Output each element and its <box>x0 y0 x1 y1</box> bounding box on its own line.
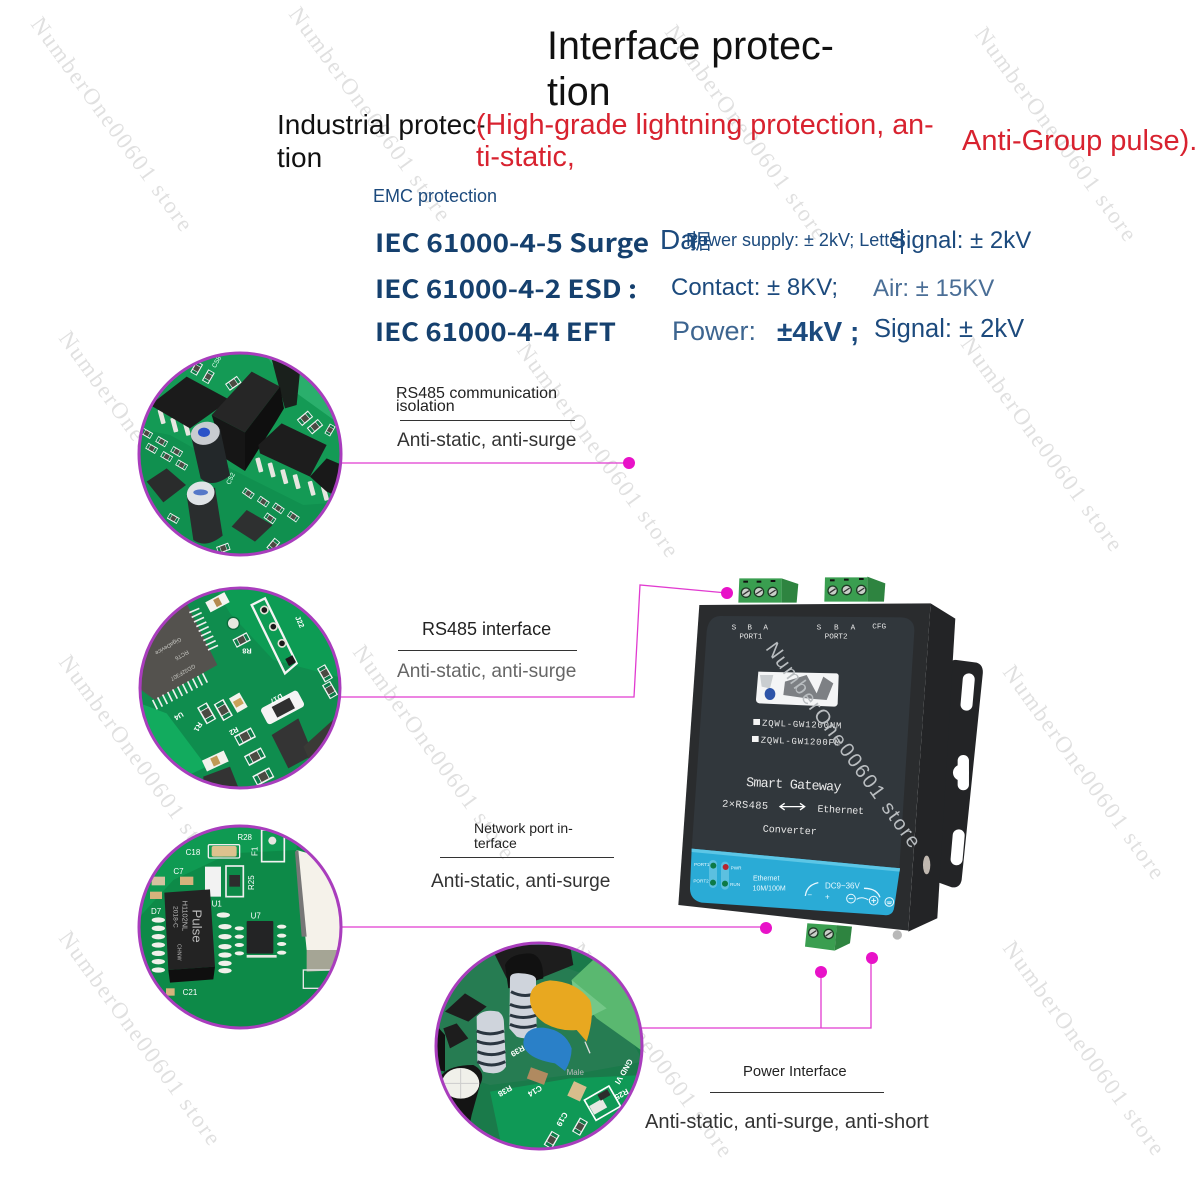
EMC row: EFT <box>375 313 1024 349</box>
label: power interface: Anti-static, anti-surge, anti-short <box>645 1111 929 1133</box>
photo: RS485 circuit: D17 <box>268 692 284 706</box>
EMC row: surge: 据 <box>690 231 711 254</box>
port labels: B <box>747 624 752 632</box>
label: RS485 communication isolation: Anti-static, anti-surge <box>397 430 576 451</box>
photo: power circuit: C14 <box>526 1083 543 1099</box>
watermarks: NumberOne00601 store <box>284 2 456 226</box>
port labels <box>732 624 887 641</box>
protocol row <box>722 799 864 817</box>
subtitle: industrial protection: tion <box>277 142 322 173</box>
photo: power circuit: C19 <box>554 1111 569 1128</box>
red text: lightning protection: ti-static, <box>476 141 575 173</box>
EMC row: surge: Da <box>660 224 696 255</box>
photo: network port circuit: C21 <box>183 988 198 997</box>
connector line: power <box>640 952 878 1028</box>
connector: power <box>805 923 852 951</box>
photo: RS485 circuit: GigaDevice <box>154 636 182 655</box>
photo: network port circuit: CHNW <box>176 944 182 962</box>
photo: power circuit: GND VI <box>613 1057 634 1086</box>
watermarks: NumberOne00601 store <box>26 12 198 236</box>
photo: network port circuit: U1 <box>212 900 222 909</box>
blurred logo label <box>756 672 839 707</box>
port labels: CFG <box>872 624 887 632</box>
indicator lights: PWR <box>731 865 742 870</box>
EMC row: ESD: Contact: ± 8KV; <box>671 274 838 301</box>
indicator lights: PORT1 <box>694 862 710 867</box>
protocol row: Ethernet <box>817 804 864 817</box>
label: power interface <box>645 1064 929 1133</box>
photo: RS485 circuit: RCT6 <box>174 648 189 661</box>
model names <box>752 719 842 748</box>
photo: RS485 circuit <box>138 586 342 790</box>
red text: lightning protection: (High-grade lightning protection, an- <box>476 109 934 141</box>
port labels: A <box>763 624 768 632</box>
port labels: PORT2 <box>825 633 848 641</box>
photo: power circuit <box>430 935 650 1155</box>
EMC row: EFT: Signal: ± 2kV <box>874 315 1024 343</box>
photo: RS485 circuit: R8 <box>242 646 252 655</box>
connector line: network port <box>340 922 772 934</box>
mounting bracket <box>932 660 983 887</box>
port labels: B <box>834 624 839 632</box>
strip text: DC9~36V <box>825 881 860 890</box>
label: network port interface: Anti-static, anti-surge <box>431 871 610 892</box>
front panel <box>692 616 914 868</box>
port labels: A <box>851 624 856 632</box>
photo: RS485 circuit: U4 <box>172 710 185 723</box>
blue strip <box>690 849 900 915</box>
connector: port 2 <box>824 577 885 602</box>
label: RS485 interface: RS485 interface <box>422 619 551 639</box>
device: smart gateway <box>678 577 983 951</box>
model names: ZQWL-GW1200FM <box>761 736 840 748</box>
photo: isolation circuit: C58 <box>211 355 223 369</box>
photo: RS485 circuit: R1 <box>192 721 204 733</box>
strip text <box>753 876 894 906</box>
photo: isolation circuit: C52 <box>225 472 237 486</box>
EMC row: ESD: IEC 61000-4-2 ESD : <box>375 270 637 306</box>
watermarks: NumberOne00601 store <box>998 660 1170 884</box>
watermarks: NumberOne00601 store <box>998 936 1170 1160</box>
EMC row: EFT: ±4kV ; <box>777 316 859 347</box>
port labels: S <box>732 624 737 632</box>
title: interface protection: tion <box>547 70 611 114</box>
photo: network port circuit: 2018-C <box>171 906 178 928</box>
photo: network port circuit: U7 <box>251 912 261 921</box>
watermarks: NumberOne00601 store <box>660 20 832 244</box>
indicator lights: RUN <box>730 882 740 887</box>
photo: network port circuit: C7 <box>173 867 184 876</box>
watermarks: NumberOne00601 store <box>54 926 226 1150</box>
photo: network port circuit: Pulse <box>190 909 205 943</box>
watermarks: NumberOne00601 store <box>566 938 738 1162</box>
strip text: Ethernet <box>753 876 779 883</box>
photo: isolation circuit <box>138 352 342 556</box>
watermarks: NumberOne00601 store <box>956 332 1128 556</box>
photo: power circuit: R38 <box>496 1083 513 1099</box>
label: network port interface <box>431 820 614 892</box>
watermark on device: NumberOne00601 store <box>761 638 925 852</box>
case side <box>908 603 955 932</box>
label: network port interface: terface <box>474 835 517 851</box>
photo: network port circuit: R25 <box>247 875 256 890</box>
strip text: + <box>825 892 830 901</box>
EMC row: EFT: Power: <box>672 316 756 346</box>
connector line: isolation <box>340 457 635 469</box>
label: RS485 interface <box>397 619 577 682</box>
connector line: RS485 <box>338 585 733 697</box>
label: RS485 communication isolation: RS485 communication <box>396 385 557 402</box>
strip text: − <box>807 890 812 899</box>
indicator lights: PORT2 <box>693 879 709 884</box>
watermarks: NumberOne00601 store <box>54 650 226 874</box>
port labels: PORT1 <box>739 633 763 641</box>
photo: power circuit: R39 <box>508 1043 526 1059</box>
connector: port 1 <box>738 578 798 603</box>
EMC row: surge: Power supply: ± 2kV; Letter <box>686 230 905 250</box>
photo: network port circuit: H1102NL <box>181 901 190 931</box>
photo: network port circuit: R28 <box>237 833 253 842</box>
subtitle: industrial protection: Industrial protec- <box>277 109 486 140</box>
title: interface protection: Interface protec- <box>547 24 834 68</box>
EMC row: surge: IEC 61000-4-5 Surge <box>375 224 649 260</box>
port labels: S <box>817 624 822 632</box>
photo: network port circuit: D7 <box>151 907 162 916</box>
photo: RS485 circuit: GD32F307 <box>169 662 196 681</box>
model names: ZQWL-GW1200NM <box>762 719 842 731</box>
label: RS485 interface: Anti-static, anti-surge <box>397 661 576 682</box>
product name: Smart Gateway <box>746 776 842 796</box>
photo: power circuit: Male <box>567 1068 585 1077</box>
photo: network port circuit <box>138 824 342 1030</box>
protocol row: 2×RS485 <box>722 799 768 813</box>
watermarks: NumberOne00601 store <box>54 326 226 550</box>
label: RS485 communication isolation <box>396 385 576 451</box>
case front <box>678 603 931 931</box>
EMC row: ESD: Air: ± 15KV <box>873 275 994 302</box>
EMC row: surge: Signal: ± 2kV <box>890 227 1031 254</box>
label: network port interface: Network port in- <box>474 820 573 836</box>
watermarks: NumberOne00601 store <box>970 22 1142 246</box>
watermarks: NumberOne00601 store <box>348 640 520 864</box>
label: power interface: Power Interface <box>743 1064 847 1080</box>
EMC heading: EMC protection <box>373 186 497 206</box>
indicator lights <box>693 860 742 890</box>
EMC row: ESD <box>375 270 994 306</box>
strip text: 10M/100M <box>753 886 786 893</box>
watermarks: NumberOne00601 store <box>512 338 684 562</box>
converter text: Converter <box>762 824 817 837</box>
photo: network port circuit: C18 <box>186 848 201 857</box>
EMC row: surge <box>375 224 1031 260</box>
red text: anti-group pulse: Anti-Group pulse). <box>962 125 1197 157</box>
photo: RS485 circuit: J22 <box>293 614 306 629</box>
photo: network port circuit: F1 <box>250 846 259 856</box>
photo: power circuit: R25 <box>612 1087 630 1102</box>
label: RS485 communication isolation: isolation <box>396 398 455 415</box>
EMC row: EFT: IEC 61000-4-4 EFT <box>375 313 616 349</box>
photo: RS485 circuit: R2 <box>228 725 240 737</box>
